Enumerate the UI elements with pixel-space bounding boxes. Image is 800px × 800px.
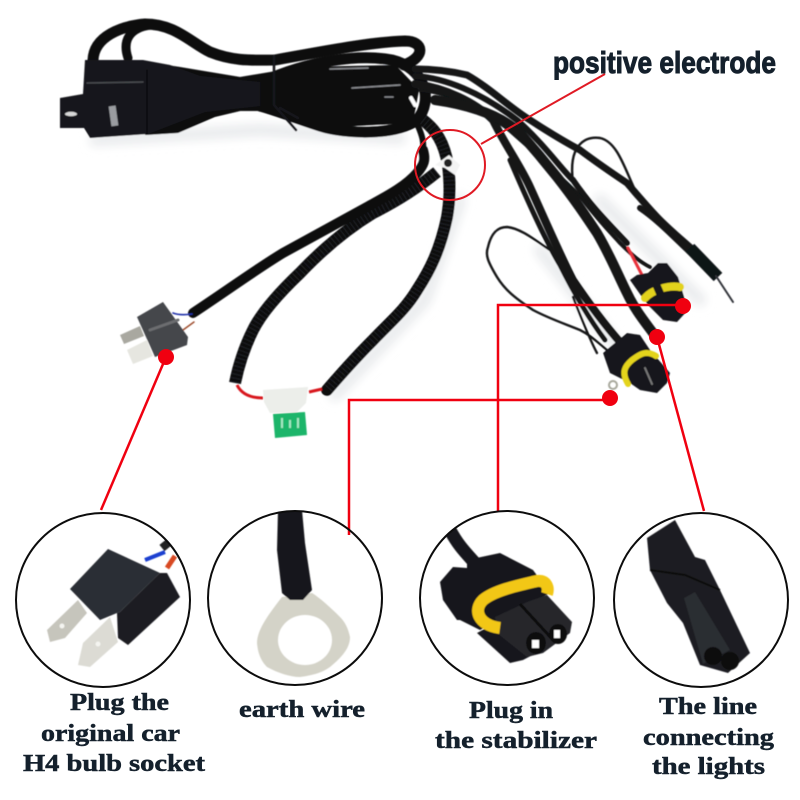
H4 plug [120, 302, 194, 364]
label: lights line: the lights [652, 754, 765, 780]
thin loop upper [572, 138, 636, 192]
thin loop lower [487, 227, 607, 350]
wire harness photo [60, 24, 733, 438]
lower stabilizer connector [603, 333, 670, 393]
leader: H4 plug to inset [101, 349, 174, 510]
bundled cable mass [140, 62, 418, 134]
leader: lamp line to inset [649, 329, 704, 511]
inset: stabilizer plug [420, 511, 594, 685]
label: H4 socket: original car [41, 721, 180, 747]
label: H4 socket: H4 bulb socket [23, 751, 205, 777]
label: lights line: connecting [643, 725, 774, 751]
corrugated tube to fuse right [327, 120, 450, 390]
label: H4 socket [23, 690, 205, 777]
corrugated tube to fuse left [235, 172, 437, 383]
soft shadow [95, 130, 700, 395]
inset: lamp line connector [614, 513, 788, 687]
relay cable loops [93, 24, 425, 132]
fuse [237, 385, 322, 438]
leader: ground terminal to inset [349, 390, 618, 535]
label: lights line: The line [659, 694, 757, 720]
lamp line connector [690, 248, 733, 302]
leader: stabilizer plug to inset [498, 298, 691, 512]
inset: H4 plug [16, 513, 190, 687]
label: earth wire: earth wire [239, 697, 365, 723]
label: lights line [643, 694, 774, 780]
label: H4 socket: Plug the [70, 690, 169, 716]
label: stabilizer [435, 698, 597, 754]
label: stabilizer: the stabilizer [435, 728, 597, 754]
inset: earth wire ring terminal [208, 510, 382, 685]
black wire to H4 plug [193, 150, 424, 313]
white wire clip [435, 155, 460, 175]
callout: positive electrode circle and leader [415, 74, 605, 200]
label: stabilizer: Plug in [469, 698, 553, 724]
upper stabilizer connector [628, 248, 688, 322]
zip tie [274, 56, 298, 130]
outgoing bundle to connectors [415, 69, 705, 353]
relay box [60, 60, 260, 138]
